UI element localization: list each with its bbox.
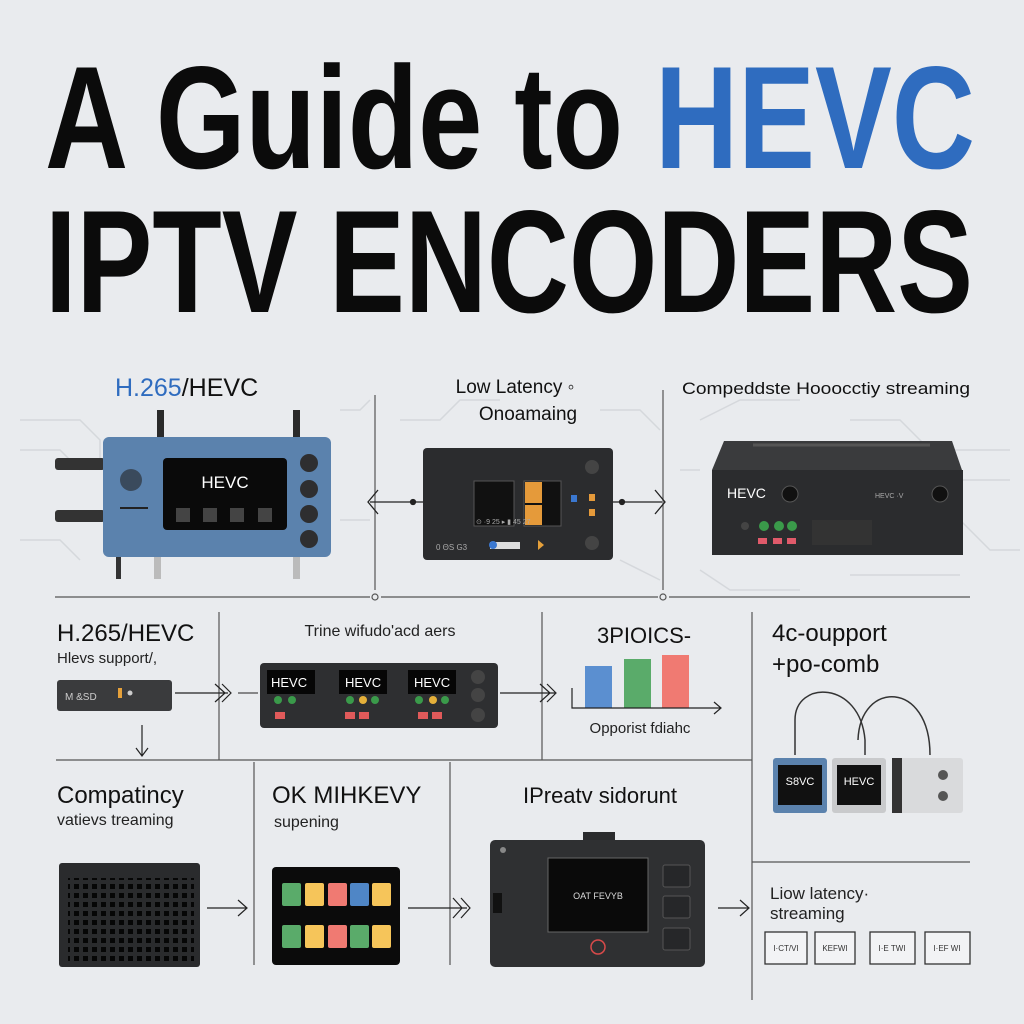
- row2 panel: 4c support: S8VC: [786, 776, 814, 788]
- row2 panel: multi encoder: HEVC: [414, 675, 450, 690]
- title: [45, 36, 975, 343]
- row3 panel: low latency streaming: I·EF WI: [933, 944, 961, 953]
- row2 panel: H.265 support: Hlevs support/,: [57, 650, 157, 667]
- row2 panel: 4c support: HEVC: [844, 776, 874, 788]
- device: blue encoder: HEVC: [201, 473, 249, 492]
- row3 panel: IPreatv device: [490, 783, 749, 967]
- row3 panel: OK MIHKEVY: [272, 782, 470, 965]
- row2 panel: H.265 support: M &SD: [65, 692, 97, 703]
- row1 label: H.265/HEVC: H.265/HEVC: [115, 374, 258, 402]
- row2 panel: 4c support: [772, 620, 963, 813]
- row1 label: low latency: Low Latency ◦: [456, 377, 574, 398]
- device: rack encoder: HEVC: [727, 485, 766, 501]
- device: middle encoder: [423, 448, 613, 560]
- row3 panel: low latency streaming: [765, 884, 970, 964]
- row2 panel: H.265 support: [57, 620, 231, 756]
- device: rack encoder: HEVC ·V: [875, 493, 904, 500]
- device: middle encoder: ⊙ ·9 25 ▸ ▮ 45 27: [476, 519, 531, 526]
- row2 panel: bar chart: 3PIOICS-: [597, 623, 691, 648]
- row3 panel: OK MIHKEVY: OK MIHKEVY: [272, 782, 421, 809]
- row2 panel: bar chart: [572, 623, 721, 737]
- row2 panel: multi encoder: [238, 623, 556, 728]
- device: blue encoder: [55, 410, 331, 579]
- row3 panel: compatincy: vatievs treaming: [57, 812, 174, 829]
- device: rack encoder: [712, 441, 963, 555]
- row1 label: streaming: Compeddste Hooocctiy streaming: [682, 379, 970, 398]
- row2 panel: bar chart: Opporist fdiahc: [590, 720, 691, 737]
- row1 label: low latency: Onoamaing: [479, 404, 577, 425]
- device: middle encoder: 0 ΘS G3: [436, 543, 468, 552]
- row3 panel: low latency streaming: KEFWI: [822, 944, 848, 953]
- row3 panel: low latency streaming: I·E TWI: [879, 944, 905, 953]
- row3 panel: compatincy: [57, 782, 247, 967]
- row2 panel: multi encoder: HEVC: [345, 675, 381, 690]
- row3 panel: low latency streaming: streaming: [770, 904, 845, 923]
- row3 panel: low latency streaming: I·CT/VI: [773, 944, 799, 953]
- row3 panel: IPreatv device: IPreatv sidorunt: [523, 783, 677, 808]
- arrows around middle device: [368, 490, 665, 514]
- row3 panel: IPreatv device: OAT FEVYB: [573, 891, 623, 901]
- row1 label: low latency: [456, 377, 577, 425]
- row2 panel: H.265 support: H.265/HEVC: [57, 620, 194, 647]
- row2 panel: multi encoder: HEVC: [271, 675, 307, 690]
- row2 panel: 4c support: +po-comb: [772, 651, 879, 678]
- row3 panel: OK MIHKEVY: supening: [274, 814, 339, 831]
- row2 panel: multi encoder: Trine wifudo'acd aers: [305, 623, 455, 640]
- dividers: [55, 390, 970, 1000]
- row3 panel: low latency streaming: Liow latency·: [770, 884, 869, 903]
- row2 panel: 4c support: 4c-oupport: [772, 620, 887, 647]
- row3 panel: compatincy: Compatincy: [57, 782, 184, 809]
